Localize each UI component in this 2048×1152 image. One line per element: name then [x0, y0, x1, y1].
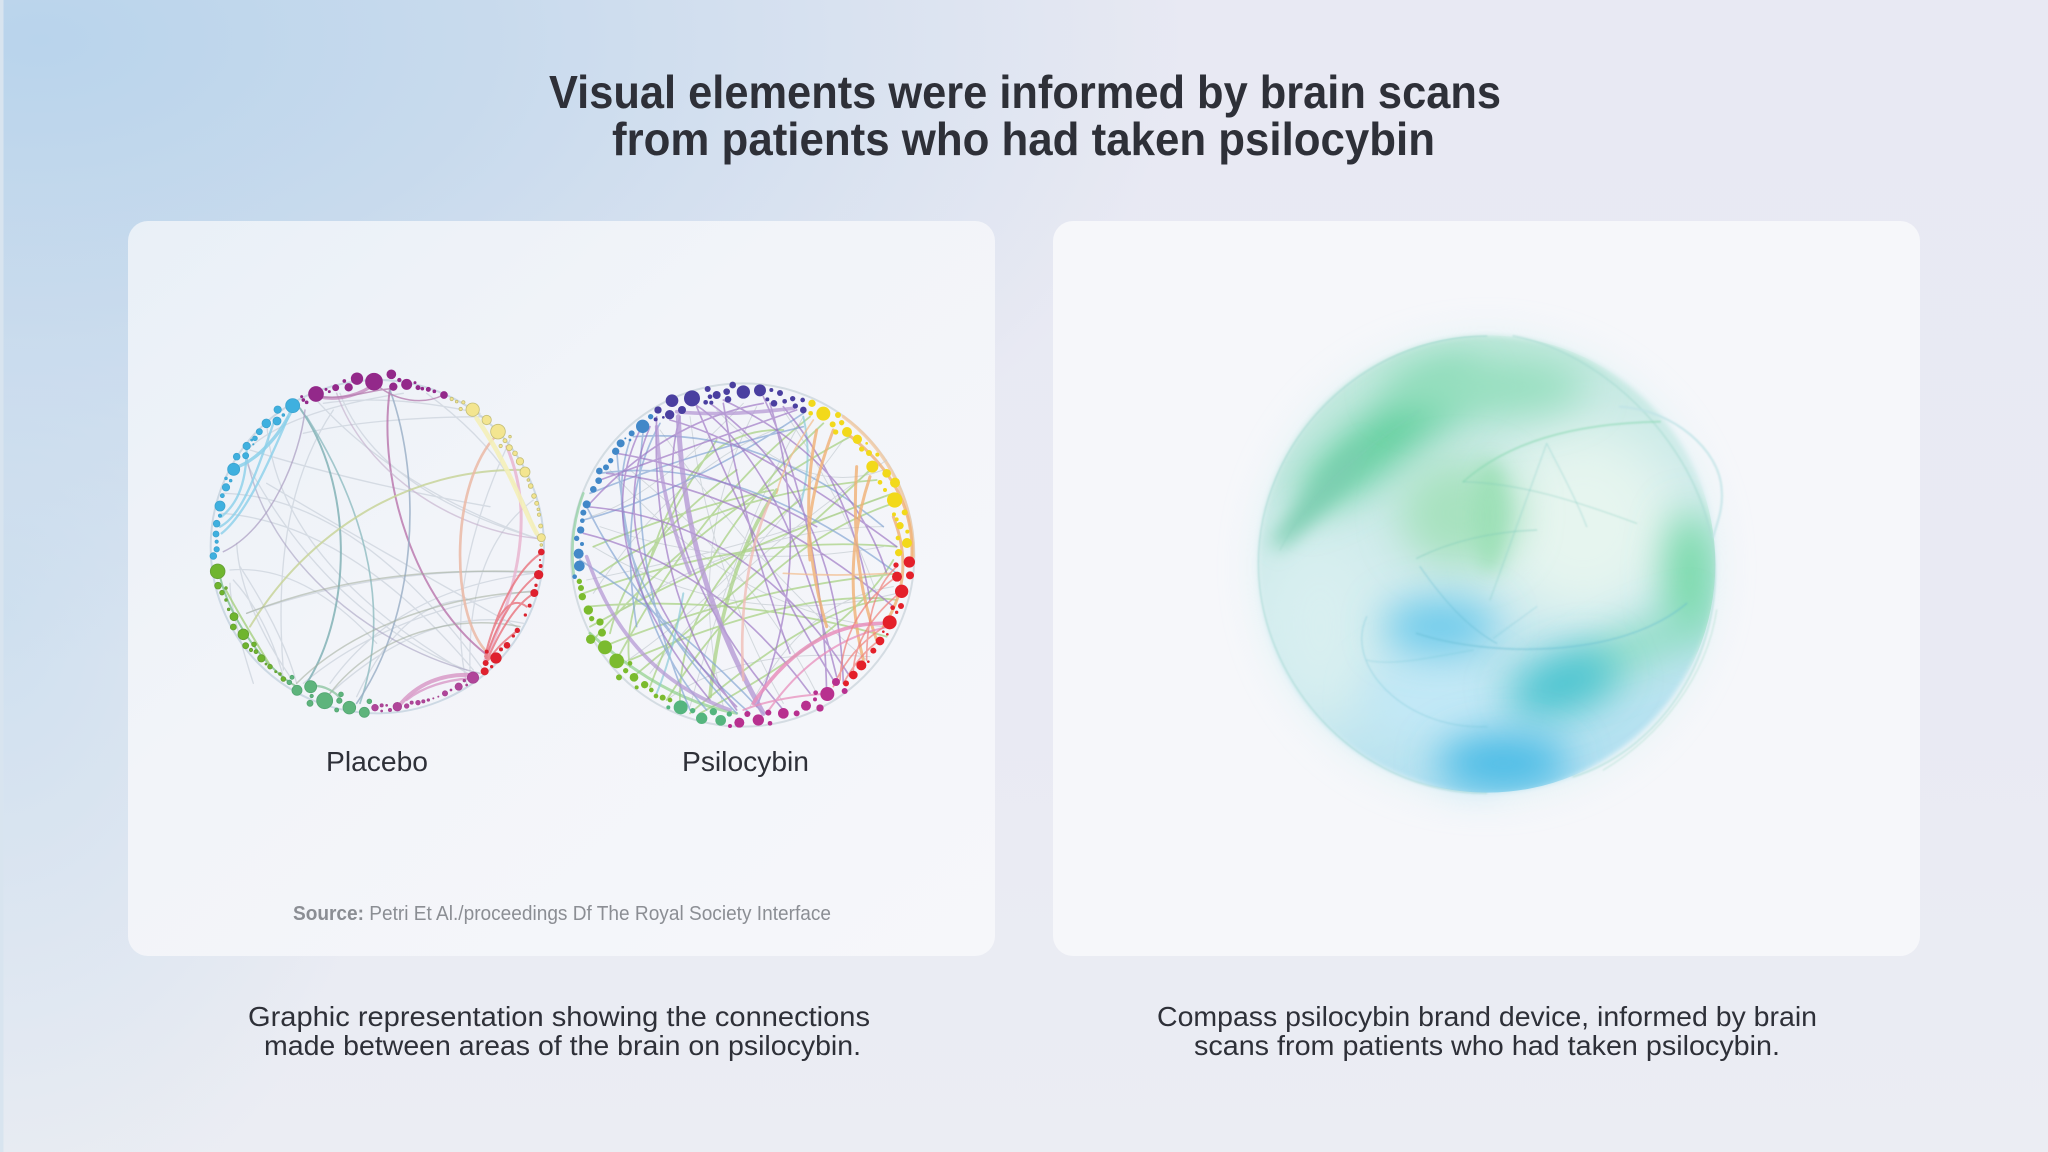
blue chords: [580, 413, 897, 713]
panel: network diagrams: [128, 221, 995, 956]
brand orb: [1257, 336, 1722, 793]
title: Visual elements were informed by brain scans: [549, 66, 1501, 118]
orb base: [1259, 336, 1715, 792]
chart: placebo connectivity: [210, 370, 545, 717]
nodes: magenta: [372, 672, 479, 712]
nodes: red: [843, 556, 915, 686]
nodes: blue: [572, 414, 653, 579]
source note: Source: Petri Et Al./proceedings Df The Royal Society Interface: [293, 903, 831, 925]
caption: right: scans from patients who had taken psilocybin.: [1194, 1030, 1780, 1061]
faint chords: [587, 403, 897, 707]
faint chords: [222, 393, 537, 697]
nodes: green: [210, 564, 286, 681]
nodes: yellow: [808, 400, 912, 556]
label: psilocybin: Psilocybin: [682, 746, 809, 777]
nodes: indigo: [654, 382, 807, 421]
nodes: purple: [301, 370, 447, 404]
purple chords: [583, 397, 897, 710]
title: from patients who had taken psilocybin: [612, 113, 1435, 165]
nodes: magenta: [728, 678, 848, 728]
nodes: teal green: [287, 675, 372, 717]
orb strands: [1258, 336, 1722, 793]
nodes: yellow: [450, 397, 545, 546]
coloured chords: [387, 388, 485, 653]
orb glow: [1260, 340, 1713, 793]
pink and red chords: [753, 623, 883, 703]
caption: right: Compass psilocybin brand device, informed by brain: [1157, 1001, 1817, 1032]
caption: right: [1157, 1001, 1817, 1061]
outer ring: [571, 383, 914, 727]
panel: brand device: [1053, 221, 1920, 956]
nodes: blue: [210, 399, 300, 559]
green chords: [583, 417, 900, 713]
label: placebo: Placebo: [326, 746, 428, 777]
nodes: red: [481, 549, 544, 675]
colour clouds: [1257, 348, 1713, 793]
caption: left: made between areas of the brain on psilocybin.: [264, 1030, 861, 1061]
title: [549, 66, 1501, 165]
orange chords: [809, 430, 912, 660]
caption: left: Graphic representation showing the connections: [248, 1001, 870, 1032]
outer ring: [211, 380, 544, 713]
nodes: green: [577, 579, 672, 702]
nodes: teal green: [666, 700, 732, 726]
chart: psilocybin connectivity: [571, 382, 915, 728]
caption: left: [248, 1001, 870, 1061]
